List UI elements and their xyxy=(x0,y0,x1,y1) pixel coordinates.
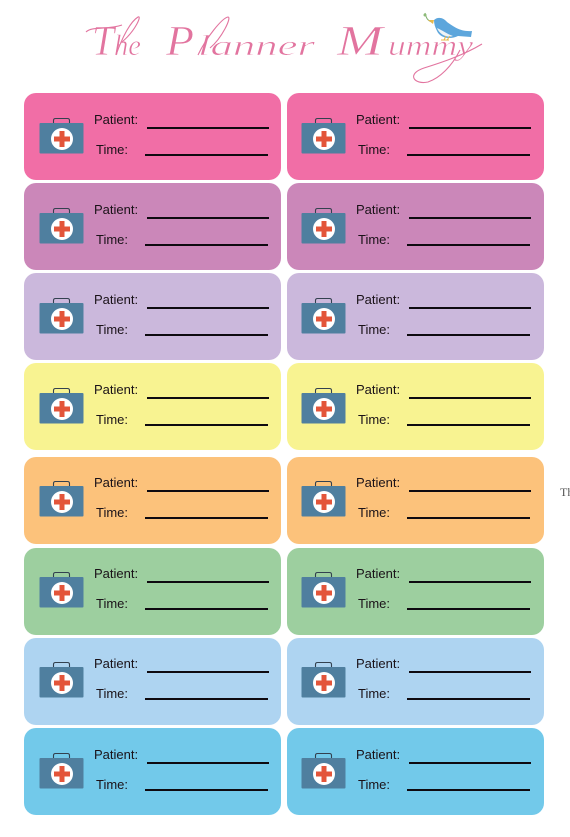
title: The Planner Mummy logo: ummy xyxy=(388,31,474,62)
patient field: Patient: xyxy=(356,382,400,397)
time field: Time: xyxy=(96,232,128,247)
patient field: Patient: xyxy=(356,656,400,671)
panel: sticker row 8 left xyxy=(24,728,281,815)
icon: medical case xyxy=(40,208,84,244)
time field: Time: xyxy=(96,596,128,611)
icon: medical case xyxy=(302,662,346,698)
icon: medical case xyxy=(40,298,84,334)
panel: sticker row 3 right xyxy=(287,273,544,360)
panel: sticker row 5 right xyxy=(287,457,544,544)
title: The Planner Mummy logo: lanner xyxy=(198,31,315,62)
icon: medical case xyxy=(40,662,84,698)
time field: Time: xyxy=(96,686,128,701)
patient field: Patient: xyxy=(356,747,400,762)
patient field: Patient: xyxy=(94,292,138,307)
panel: sticker row 2 left xyxy=(24,183,281,270)
icon: medical case xyxy=(302,754,346,788)
icon: medical case xyxy=(302,118,346,154)
title: The Planner Mummy logo: he xyxy=(114,29,141,62)
panel: sticker row 1 left xyxy=(24,93,281,180)
patient field: Patient: xyxy=(356,112,400,127)
panel: sticker row 3 left xyxy=(24,273,281,360)
panel: sticker row 6 right xyxy=(287,548,544,635)
time field: Time: xyxy=(358,686,390,701)
time field: Time: xyxy=(358,505,390,520)
time field: Time: xyxy=(358,232,390,247)
time field: Time: xyxy=(96,505,128,520)
patient field: Patient: xyxy=(94,475,138,490)
panel: sticker row 7 right xyxy=(287,638,544,725)
patient field: Patient: xyxy=(94,656,138,671)
time field: Time: xyxy=(358,142,390,157)
panel: sticker row 5 left xyxy=(24,457,281,544)
panel: sticker row 4 right xyxy=(287,363,544,450)
icon: medical case xyxy=(40,118,84,154)
icon: medical case xyxy=(40,572,84,608)
patient field: Patient: xyxy=(94,202,138,217)
icon: medical case xyxy=(302,572,346,608)
title: The Planner Mummy logo: P xyxy=(165,19,194,65)
time field: Time: xyxy=(96,322,128,337)
time field: Time: xyxy=(358,412,390,427)
time field: Time: xyxy=(358,322,390,337)
patient field: Patient: xyxy=(94,382,138,397)
patient field: Patient: xyxy=(94,747,138,762)
patient field: Patient: xyxy=(94,112,138,127)
panel: sticker row 6 left xyxy=(24,548,281,635)
panel: sticker row 7 left xyxy=(24,638,281,725)
patient field: Patient: xyxy=(356,566,400,581)
panel: sticker row 2 right xyxy=(287,183,544,270)
time field: Time: xyxy=(96,142,128,157)
icon: medical case xyxy=(40,388,84,424)
icon: medical case xyxy=(302,298,346,334)
patient field: Patient: xyxy=(356,475,400,490)
panel: sticker row 1 right xyxy=(287,93,544,180)
time field: Time: xyxy=(358,596,390,611)
icon: medical case xyxy=(302,482,346,516)
panel: sticker row 4 left xyxy=(24,363,281,450)
panel: sticker row 8 right xyxy=(287,728,544,815)
time field: Time: xyxy=(96,412,128,427)
patient field: Patient: xyxy=(94,566,138,581)
title: The Planner Mummy logo xyxy=(86,17,482,83)
icon: medical case xyxy=(40,754,84,788)
title: The Planner Mummy logo: T xyxy=(92,19,116,65)
icon: blue bird with sprig xyxy=(424,13,472,40)
patient field: Patient: xyxy=(356,202,400,217)
time field: Time: xyxy=(96,777,128,792)
time field: Time: xyxy=(358,777,390,792)
icon: medical case xyxy=(40,482,84,516)
title: The Planner Mummy logo: M xyxy=(336,19,386,65)
patient field: Patient: xyxy=(356,292,400,307)
icon: medical case xyxy=(302,208,346,244)
icon: medical case xyxy=(302,388,346,424)
